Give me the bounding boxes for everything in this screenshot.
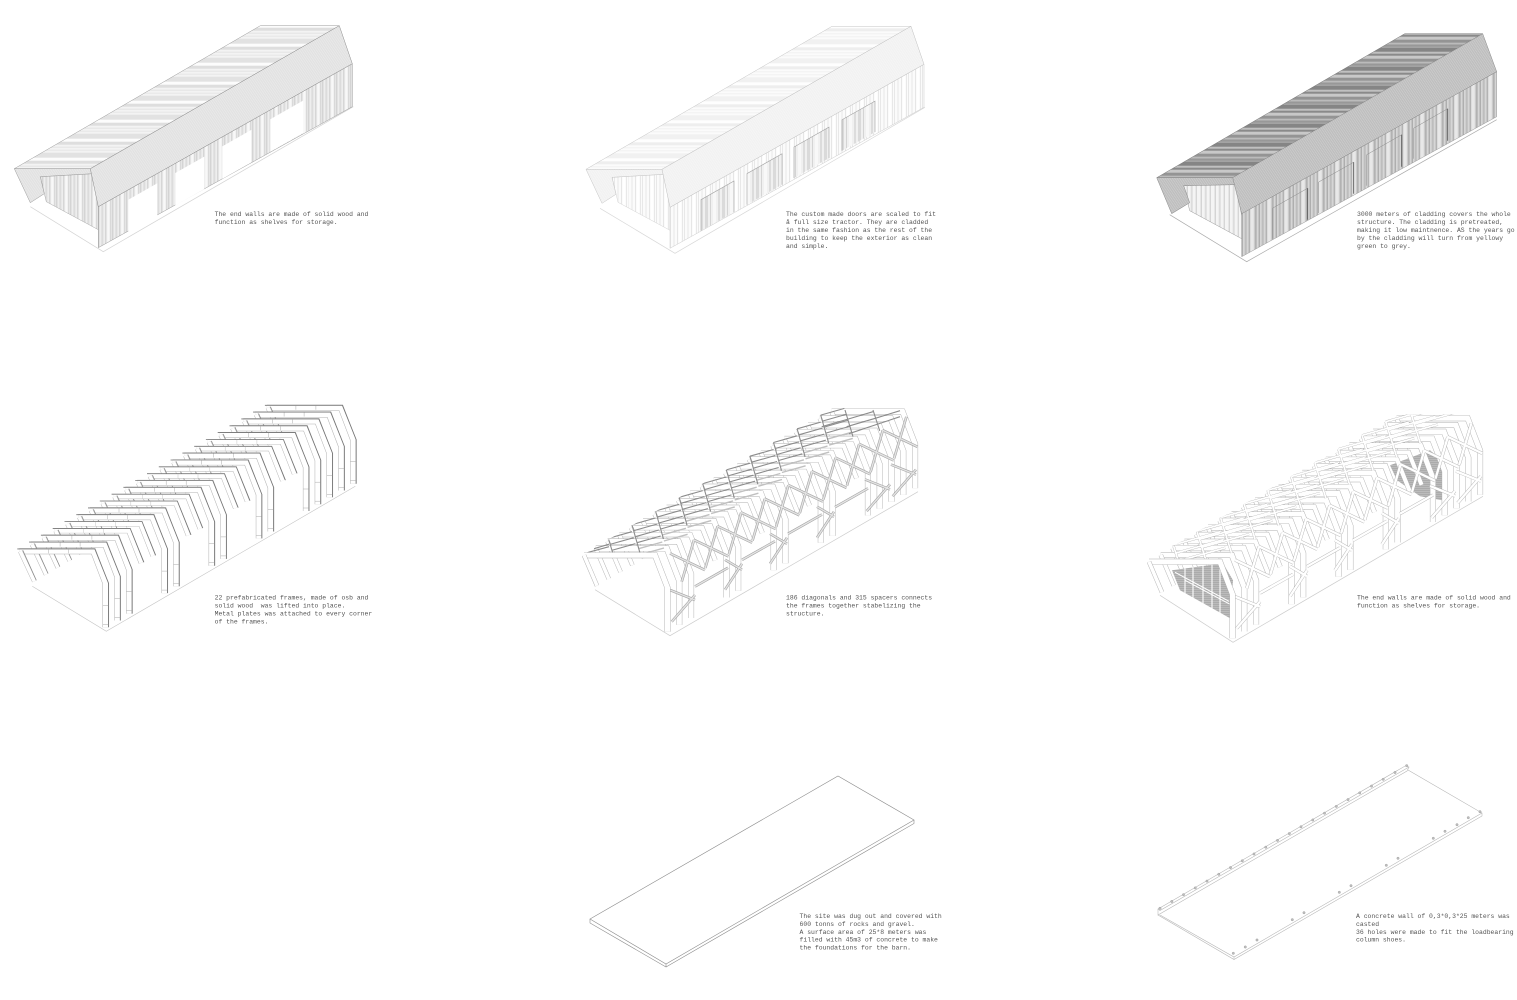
caption: The end walls are made of solid wood and bbox=[1357, 594, 1511, 602]
caption: function as shelves for storage. bbox=[1357, 602, 1480, 610]
near side diagonals bbox=[670, 417, 917, 622]
frames bbox=[1161, 418, 1480, 632]
gable band and left leg bbox=[1157, 178, 1236, 214]
roof spacers and diagonals bbox=[587, 408, 900, 554]
caption: making it low maintnence. AS the years go bbox=[1357, 227, 1515, 234]
column shoe holes: back row bbox=[1159, 764, 1408, 910]
slab outline bbox=[600, 107, 925, 253]
inner back end wall bbox=[40, 174, 98, 230]
panel: foundation slab bbox=[590, 776, 942, 967]
panel: prefabricated frames bbox=[17, 405, 372, 631]
slab outline bbox=[1160, 496, 1483, 642]
panel: barn with custom doors bbox=[586, 26, 936, 253]
door edges bbox=[1273, 109, 1448, 239]
drawing: 22 frames bbox=[17, 405, 356, 631]
caption: A surface area of 25*8 meters was bbox=[800, 929, 927, 936]
caption: the foundations for the barn. bbox=[800, 945, 911, 952]
inner back end wall bbox=[1184, 183, 1242, 239]
panel: end wall shelves bbox=[1149, 395, 1511, 642]
caption: 36 holes were made to fit the loadbearing bbox=[1356, 929, 1514, 936]
lower roof spacers bbox=[639, 432, 853, 555]
door right edges bbox=[1308, 109, 1448, 220]
caption: 3000 meters of cladding covers the whole bbox=[1357, 211, 1511, 218]
caption: Metal plates was attached to every corner bbox=[215, 610, 372, 618]
doors bbox=[701, 101, 875, 231]
caption: casted bbox=[1356, 921, 1379, 928]
drawing: slab with wall bbox=[1158, 766, 1482, 960]
caption: 186 diagonals and 315 spacers connects bbox=[786, 594, 932, 602]
caption: The end walls are made of solid wood and bbox=[215, 211, 369, 218]
frames bbox=[17, 405, 356, 627]
caption: structure. bbox=[786, 610, 824, 618]
far roof slope bbox=[1157, 34, 1483, 178]
caption: green to grey. bbox=[1357, 243, 1411, 250]
front frame bbox=[584, 555, 668, 632]
panel: finished barn with open end walls and doorways bbox=[14, 26, 369, 252]
caption: The custom made doors are scaled to fit bbox=[786, 211, 936, 218]
caption: column shoes. bbox=[1356, 937, 1406, 944]
roof lattice bbox=[1172, 414, 1454, 566]
caption: The site was dug out and covered with bbox=[800, 913, 942, 920]
slab outline bbox=[1170, 120, 1497, 262]
gable band and left leg bbox=[14, 169, 92, 203]
far roof slope bbox=[14, 26, 339, 169]
caption: A concrete wall of 0,3*0,3*25 meters was bbox=[1356, 913, 1510, 920]
slab outline bbox=[32, 486, 355, 631]
caption: 600 tonns of rocks and gravel. bbox=[800, 921, 915, 928]
drawing: structure with shelves bbox=[1149, 395, 1483, 642]
gable band and left leg bbox=[586, 169, 664, 203]
caption: structure. The cladding is pretreated, bbox=[1357, 219, 1503, 226]
near roof slope bbox=[662, 26, 924, 207]
slab outline bbox=[30, 107, 353, 252]
caption: 22 prefabricated frames, made of osb and bbox=[215, 594, 369, 602]
caption: building to keep the exterior as clean bbox=[786, 235, 932, 242]
door openings bbox=[128, 100, 303, 232]
caption: å full size tractor. They are cladded bbox=[786, 218, 928, 226]
caption: the frames together stabelizing the bbox=[786, 602, 921, 610]
near side lattice bbox=[1235, 423, 1482, 628]
door edges bbox=[701, 101, 875, 231]
near wall cladding bbox=[98, 64, 352, 248]
drawing: barn without doors bbox=[14, 26, 353, 252]
drawing: barn with cladded doors bbox=[586, 26, 925, 253]
near roof slope bbox=[90, 26, 352, 207]
rear shelves bbox=[1390, 450, 1443, 500]
slab outline bbox=[595, 492, 918, 636]
near wall cladding bbox=[1242, 72, 1497, 257]
drawing: fully clad barn bbox=[1157, 34, 1497, 262]
drawing: frames with diagonal lattice bbox=[584, 408, 918, 636]
caption: filled with 45m3 of concrete to make bbox=[800, 937, 938, 944]
far roof slope bbox=[586, 26, 911, 169]
caption: and simple. bbox=[786, 243, 828, 250]
panel: barn with dark cladding bbox=[1157, 34, 1515, 262]
near roof slope bbox=[1233, 34, 1497, 214]
panel: concrete wall and column holes bbox=[1158, 764, 1514, 960]
caption: by the cladding will turn from yellowy bbox=[1357, 235, 1503, 242]
caption: function as shelves for storage. bbox=[215, 219, 338, 226]
caption: solid wood was lifted into place. bbox=[215, 602, 345, 610]
near wall cladding bbox=[670, 64, 924, 248]
front frame bbox=[1149, 562, 1232, 638]
drawing: slab bbox=[590, 776, 914, 967]
column shoe holes: front row bbox=[1232, 810, 1481, 954]
front shelves bbox=[1172, 563, 1233, 618]
frames bbox=[596, 412, 915, 625]
panel: diagonals and spacers bbox=[584, 408, 932, 636]
caption: in the same fashion as the rest of the bbox=[786, 227, 932, 234]
caption: of the frames. bbox=[215, 618, 268, 626]
inner back end wall bbox=[612, 174, 670, 230]
